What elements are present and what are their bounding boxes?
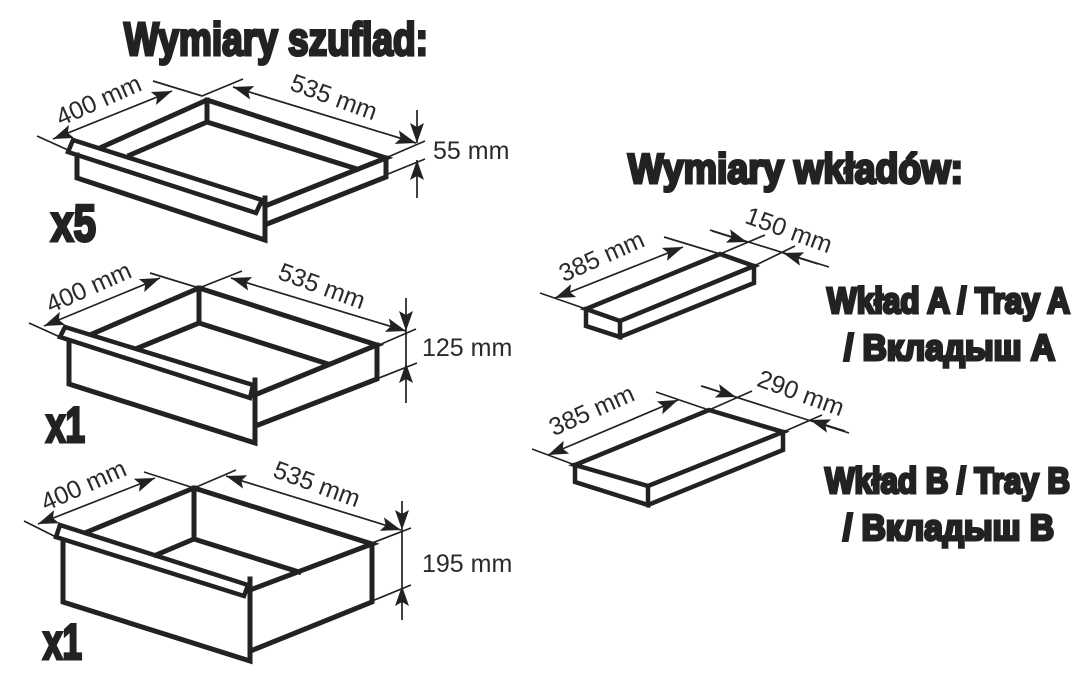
quantity x1: x1 [46,397,85,453]
drawer 2 dimension lines [29,271,417,403]
label: 385 mm: 385 mm [555,226,649,288]
tray B body [575,410,783,505]
drawer 2: 125 mm [29,257,512,453]
label: 385 mm: 385 mm [545,380,639,442]
tray A dimension lines [540,230,829,309]
tray B [532,365,1070,548]
drawer 1 body [68,100,386,240]
label: 55 mm: 55 mm [433,137,509,165]
drawer 1: 55 mm [37,69,509,253]
tray A name [827,280,1070,368]
label: 535 mm: 535 mm [287,69,381,126]
title: tray dimensions: Wymiary wkładów: [628,145,963,192]
drawer 3: 195 mm [24,455,512,670]
label: 535 mm: 535 mm [275,258,369,315]
drawer 1 dimension lines [37,79,425,198]
tray B name [825,460,1070,548]
tray A name: / Вкладыш A [844,327,1055,368]
label: 535 mm: 535 mm [270,456,364,513]
label: 400 mm: 400 mm [42,257,136,319]
tray A body [586,254,754,337]
label: 400 mm: 400 mm [37,455,131,517]
drawer 3 dimension lines [24,470,411,620]
label: 400 mm: 400 mm [52,70,146,132]
label: 290 mm: 290 mm [754,365,848,422]
label: 150 mm: 150 mm [742,202,836,259]
quantity x1: x1 [43,614,82,670]
label: 195 mm: 195 mm [422,550,512,578]
drawer 3 body [56,488,372,661]
title: drawer dimensions: Wymiary szuflad: [124,13,428,65]
quantity x5: x5 [51,195,96,253]
tray A [540,202,1070,368]
label: 125 mm: 125 mm [422,334,512,362]
tray B name: / Вкладыш B [843,507,1054,548]
tray B dimension lines [532,386,849,465]
drawer 2 body [60,288,377,443]
